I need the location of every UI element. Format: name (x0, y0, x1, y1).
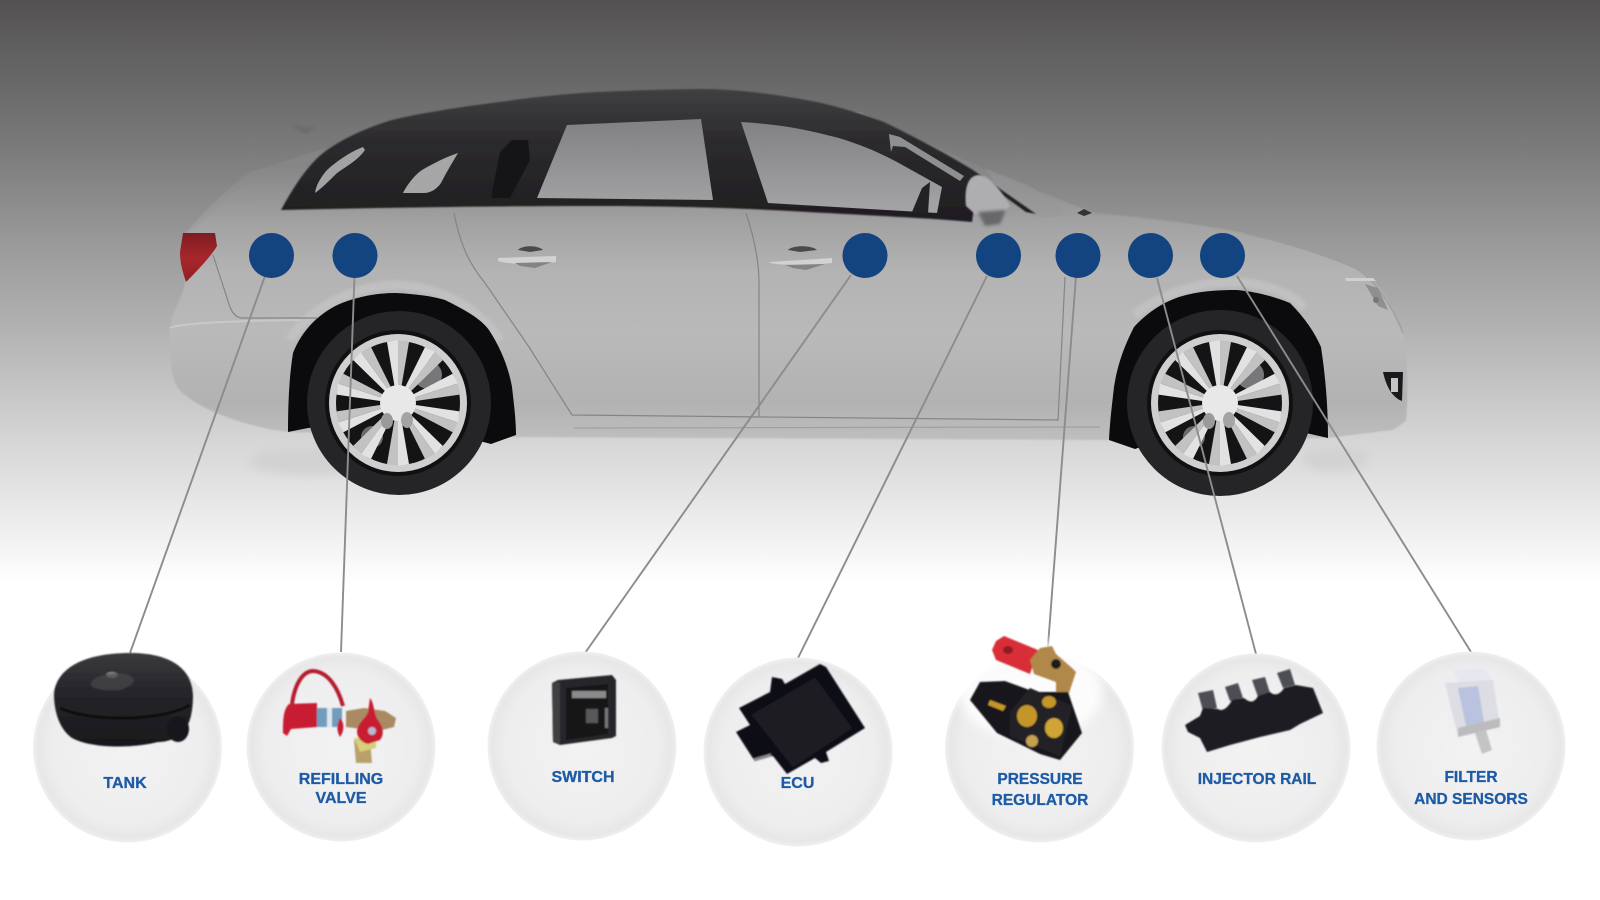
smudge on rear roof (290, 124, 317, 134)
rear quarter window highlight 2 (403, 153, 458, 193)
rear door handle (498, 246, 556, 268)
front side window (741, 122, 942, 213)
label: filter line 2: AND SENSORS (1414, 791, 1528, 808)
icon: tank (54, 653, 193, 747)
B pillar seat silhouette (492, 140, 530, 198)
line: ECU (798, 276, 987, 658)
fog lamp (1383, 372, 1403, 401)
rear side window (537, 119, 713, 200)
front tire (1127, 310, 1313, 496)
front window pillar (912, 182, 930, 214)
rear bumper crease (170, 320, 300, 328)
marker: refilling valve (332, 233, 378, 278)
disc (704, 658, 892, 846)
headlight (1345, 278, 1388, 310)
label: switch: SWITCH (551, 769, 615, 786)
halo behind regulator (958, 640, 1102, 740)
line: filter and sensors (1237, 276, 1471, 652)
component: injector rail (1162, 654, 1350, 842)
marker: pressure regulator (1056, 233, 1100, 278)
label: injector rail: INJECTOR RAIL (1198, 771, 1316, 788)
label: pressure regulator line 2: REGULATOR (992, 792, 1088, 809)
quarter vent window (889, 134, 964, 181)
line: switch (585, 275, 851, 653)
marker: injector rail (1128, 233, 1173, 278)
car body (170, 112, 1407, 440)
door shut lines (213, 213, 1100, 428)
side mirror (966, 175, 1010, 214)
marker: ECU (976, 233, 1021, 278)
label: tank: TANK (103, 775, 147, 792)
icon: pressure regulator (970, 636, 1082, 760)
fog lamp lens (1391, 378, 1398, 392)
label: filter line 1: FILTER (1444, 769, 1498, 786)
line: refilling valve (341, 276, 354, 652)
mirror shadow (978, 210, 1006, 226)
label: refilling valve line 2: VALVE (316, 790, 367, 807)
component: filter and sensors (1376, 652, 1566, 840)
car (170, 89, 1407, 496)
icon: ECU (736, 664, 865, 774)
disc (1376, 652, 1566, 840)
label: pressure regulator line 1: PRESSURE (997, 771, 1083, 788)
icon: filter (1445, 668, 1500, 754)
component: tank (33, 653, 222, 842)
windshield glass haze (985, 168, 1068, 218)
location markers (249, 233, 1245, 278)
dark glasshouse (281, 89, 1036, 222)
rear rim (325, 330, 471, 476)
icon: switch (552, 675, 616, 745)
front door handle (770, 246, 832, 270)
disc (33, 654, 222, 842)
front wheel arch (1109, 290, 1328, 449)
front rim (1147, 330, 1293, 476)
rear hatch edge (186, 172, 255, 232)
marker: switch (842, 233, 888, 278)
rear tire (307, 311, 491, 495)
disc (246, 652, 436, 842)
label: ECU: ECU (781, 775, 814, 792)
label: refilling valve line 1: REFILLING (299, 771, 383, 788)
car shadows (248, 447, 1369, 475)
line: injector rail (1157, 278, 1256, 654)
wheel arch lips (290, 282, 1304, 340)
disc (945, 654, 1134, 842)
component: switch (488, 652, 676, 840)
rear quarter window highlight 1 (315, 147, 365, 193)
connector lines (130, 275, 1471, 658)
component: ECU (704, 658, 892, 846)
tail light (180, 233, 217, 282)
marker: tank (249, 233, 294, 278)
icon: injector rail (1185, 669, 1323, 752)
hood wiper (1077, 209, 1092, 216)
hood contour (1243, 233, 1403, 333)
disc (488, 652, 676, 840)
line: tank (130, 276, 265, 653)
marker: filter and sensors (1200, 233, 1245, 278)
line: pressure regulator (1048, 276, 1076, 646)
disc (1162, 654, 1350, 842)
icon: refilling valve (283, 671, 396, 763)
rear wheel arch (288, 293, 516, 444)
component: refilling valve (246, 652, 436, 842)
component: pressure regulator (945, 636, 1134, 842)
